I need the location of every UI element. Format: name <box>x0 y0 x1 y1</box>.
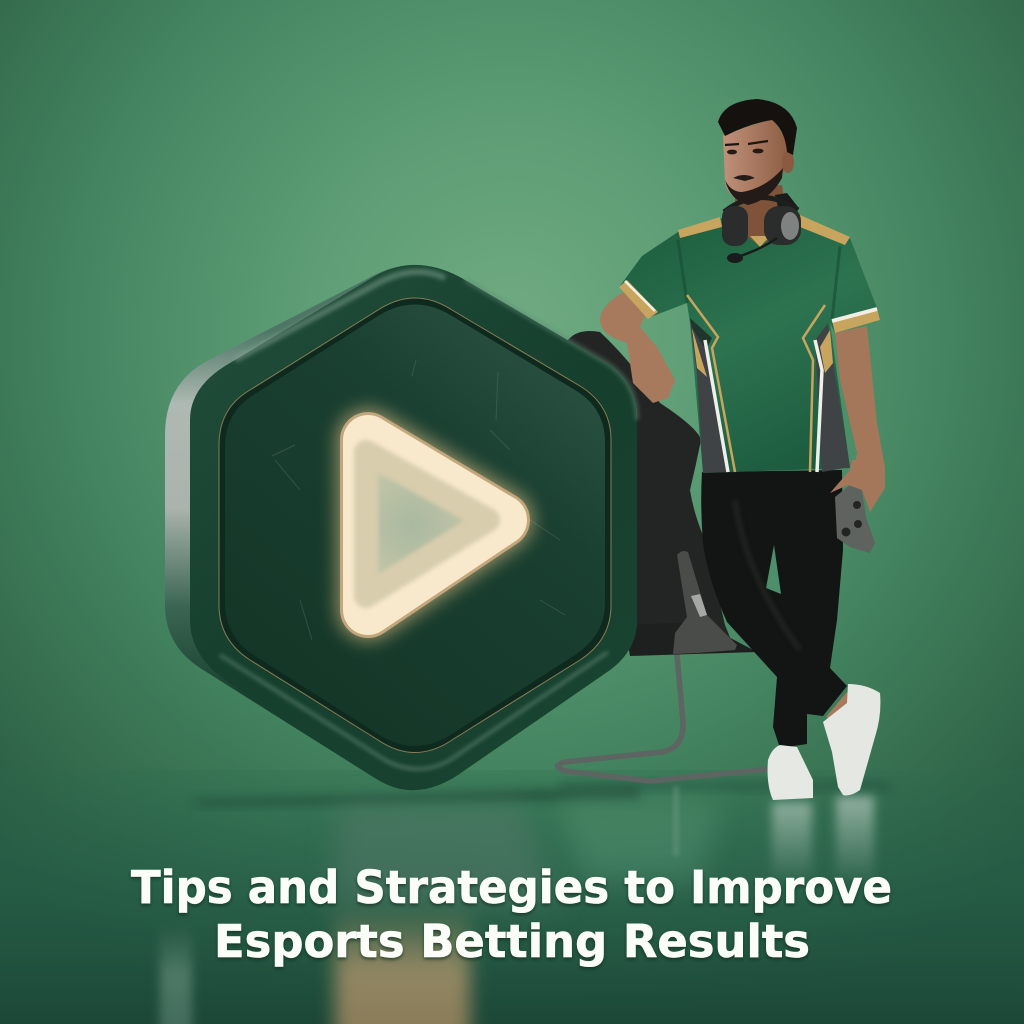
left arm <box>600 290 675 403</box>
title <box>131 861 892 968</box>
chair <box>558 331 770 781</box>
hexagon side extrusion <box>165 265 637 789</box>
ear <box>782 151 794 173</box>
pants <box>701 470 847 748</box>
eyes and brows <box>725 141 768 145</box>
right side panel <box>815 323 850 472</box>
left shoe <box>768 745 813 800</box>
head <box>723 118 792 204</box>
right shoe <box>823 684 880 795</box>
chair back <box>568 331 735 654</box>
title line 2: Esports Betting Results <box>214 915 810 968</box>
scratches <box>272 360 565 640</box>
hand <box>830 460 885 512</box>
controller <box>835 485 875 553</box>
hair <box>718 99 797 155</box>
chair armrest <box>673 551 737 654</box>
collar <box>775 193 798 222</box>
neck <box>735 185 788 248</box>
hexagon play badge <box>165 265 637 790</box>
mic <box>737 238 777 257</box>
ankle <box>826 692 852 722</box>
hexagon inner face <box>225 304 605 746</box>
sleeve cuffs <box>619 280 658 319</box>
left side panel <box>690 320 728 473</box>
right arm <box>835 326 885 512</box>
chair legs <box>558 655 770 781</box>
beard <box>725 168 783 205</box>
person <box>600 99 885 800</box>
floor reflections <box>160 780 890 1024</box>
shirt body <box>620 215 880 473</box>
play triangle <box>368 440 502 610</box>
shirt sleeve shade <box>678 240 840 320</box>
hexagon inner recess <box>219 298 611 752</box>
glow <box>368 440 502 610</box>
hexagon front rim <box>190 265 637 790</box>
headphones <box>724 197 798 212</box>
shoulder trims <box>678 215 850 245</box>
chair seat <box>625 622 757 656</box>
title line 1: Tips and Strategies to Improve <box>131 861 892 914</box>
